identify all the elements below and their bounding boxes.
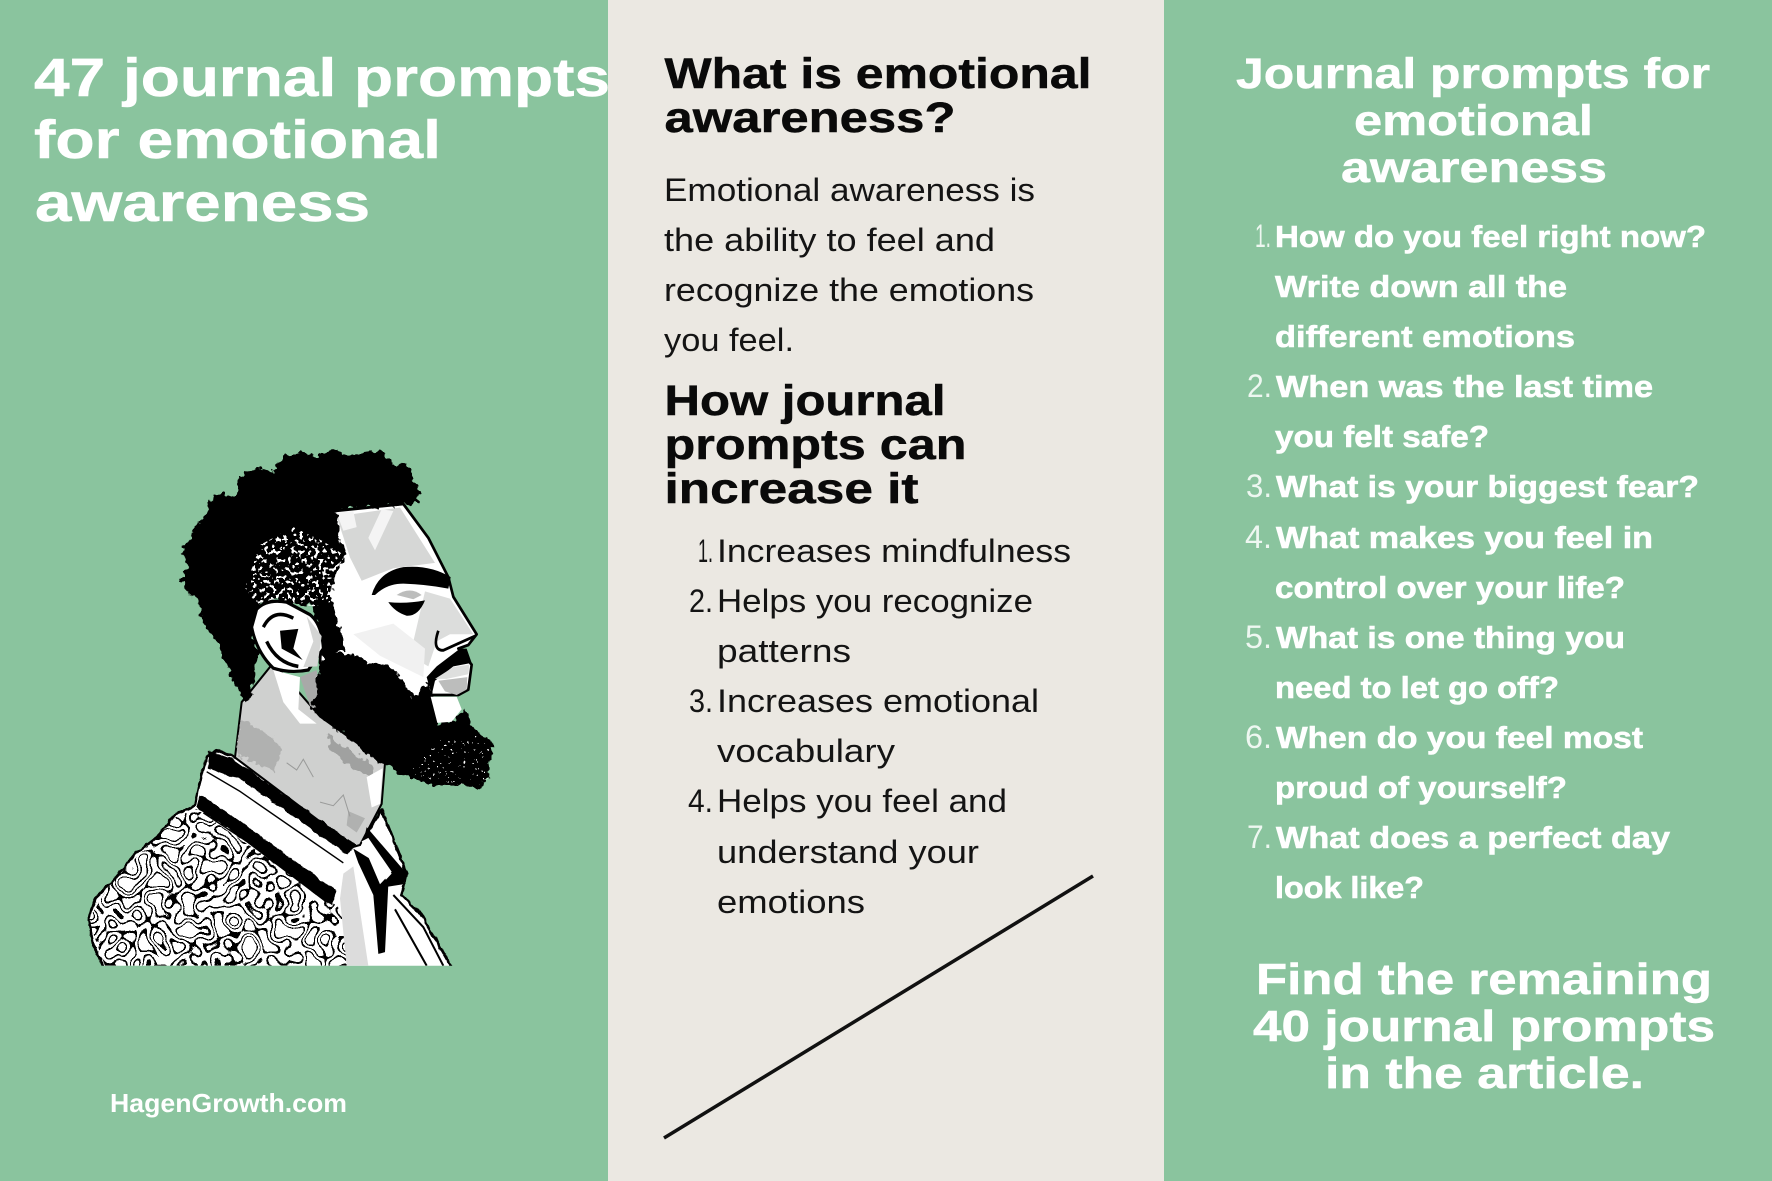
beard: [313, 655, 492, 788]
diagonal line: [664, 876, 1093, 1138]
benefits list: Helps you feel and: [717, 783, 1007, 819]
title: for emotional: [34, 110, 441, 170]
benefits list: Helps you recognize: [717, 583, 1033, 619]
prompts list: 7.: [1247, 819, 1272, 855]
prompts list: When do you feel most: [1276, 720, 1643, 755]
closing call to action: in the article.: [1325, 1049, 1644, 1098]
illustration: bearded man in profile with closed eyes: [87, 450, 497, 974]
definition text: the ability to feel and: [664, 222, 995, 258]
website credit: HagenGrowth.com: [110, 1088, 347, 1118]
prompts list: 6.: [1245, 719, 1272, 755]
heading: journal prompts for emotional awareness: Journal prompts for: [1236, 50, 1710, 98]
eyebrow: [372, 567, 451, 595]
heading: how journal prompts can increase it: [664, 377, 966, 513]
panel: middle explainer: [608, 0, 1164, 1181]
prompts list: When was the last time: [1276, 369, 1653, 404]
closing call to action: Find the remaining: [1256, 955, 1712, 1004]
title: [34, 48, 610, 233]
prompts list: [1245, 218, 1706, 905]
definition text: Emotional awareness is: [664, 172, 1035, 208]
prompts list: need to let go off?: [1275, 670, 1559, 705]
prompts list: proud of yourself?: [1275, 770, 1567, 805]
closed eye: [388, 591, 425, 616]
heading: journal prompts for emotional awareness: [1236, 50, 1710, 192]
benefits list: 3.: [689, 683, 713, 719]
panel: left cover: [34, 56, 608, 1118]
prompts list: 3.: [1246, 468, 1272, 504]
prompts list: control over your life?: [1275, 570, 1625, 605]
definition text: [664, 172, 1035, 358]
prompts list: 1.: [1255, 218, 1271, 254]
prompts list: different emotions: [1275, 319, 1575, 354]
ear: [252, 601, 323, 671]
prompts list: What makes you feel in: [1276, 520, 1653, 555]
prompts list: What does a perfect day: [1276, 820, 1671, 855]
panel: right prompts: [1164, 0, 1772, 1181]
prompts list: How do you feel right now?: [1275, 219, 1706, 254]
benefits list: Increases emotional: [717, 683, 1039, 719]
neck: [235, 663, 385, 847]
prompts list: What is one thing you: [1276, 620, 1625, 655]
benefits list: Increases mindfulness: [717, 533, 1071, 569]
benefits list: 4.: [688, 783, 713, 819]
prompts list: Write down all the: [1275, 269, 1567, 304]
prompts list: 5.: [1245, 619, 1272, 655]
heading: what is emotional awareness: What is emotional: [664, 50, 1092, 98]
title: 47 journal prompts: [34, 48, 610, 108]
heading: how journal prompts can increase it: prompts can: [664, 421, 966, 469]
prompts list: 2.: [1247, 368, 1272, 404]
heading: journal prompts for emotional awareness: emotional: [1354, 97, 1593, 145]
benefits list: emotions: [717, 884, 865, 920]
definition text: you feel.: [664, 322, 794, 358]
closing call to action: [1253, 955, 1715, 1098]
heading: what is emotional awareness: [664, 50, 1092, 142]
collar: [197, 750, 443, 966]
prompts list: 4.: [1245, 519, 1272, 555]
title: awareness: [35, 173, 370, 233]
benefits list: vocabulary: [717, 733, 896, 769]
hair texture: [246, 527, 344, 606]
prompts list: What is your biggest fear?: [1276, 469, 1699, 504]
prompts list: look like?: [1275, 870, 1424, 905]
prompts list: you felt safe?: [1275, 419, 1489, 454]
benefits list: [688, 533, 1071, 920]
hair: [182, 450, 420, 702]
benefits list: 2.: [689, 583, 713, 619]
heading: how journal prompts can increase it: increase it: [664, 465, 918, 513]
heading: journal prompts for emotional awareness: awareness: [1341, 144, 1607, 192]
nose: [436, 631, 475, 650]
moustache: [427, 649, 472, 695]
heading: what is emotional awareness: awareness?: [664, 94, 956, 142]
closing call to action: 40 journal prompts: [1253, 1002, 1715, 1051]
heading: how journal prompts can increase it: How journal: [664, 377, 946, 425]
definition text: recognize the emotions: [664, 272, 1034, 308]
shirt: [88, 750, 455, 974]
benefits list: patterns: [717, 633, 851, 669]
face: [320, 504, 477, 724]
lips: [431, 665, 469, 723]
shirt pattern: [90, 809, 347, 966]
benefits list: understand your: [717, 834, 979, 870]
benefits list: 1.: [698, 533, 713, 569]
